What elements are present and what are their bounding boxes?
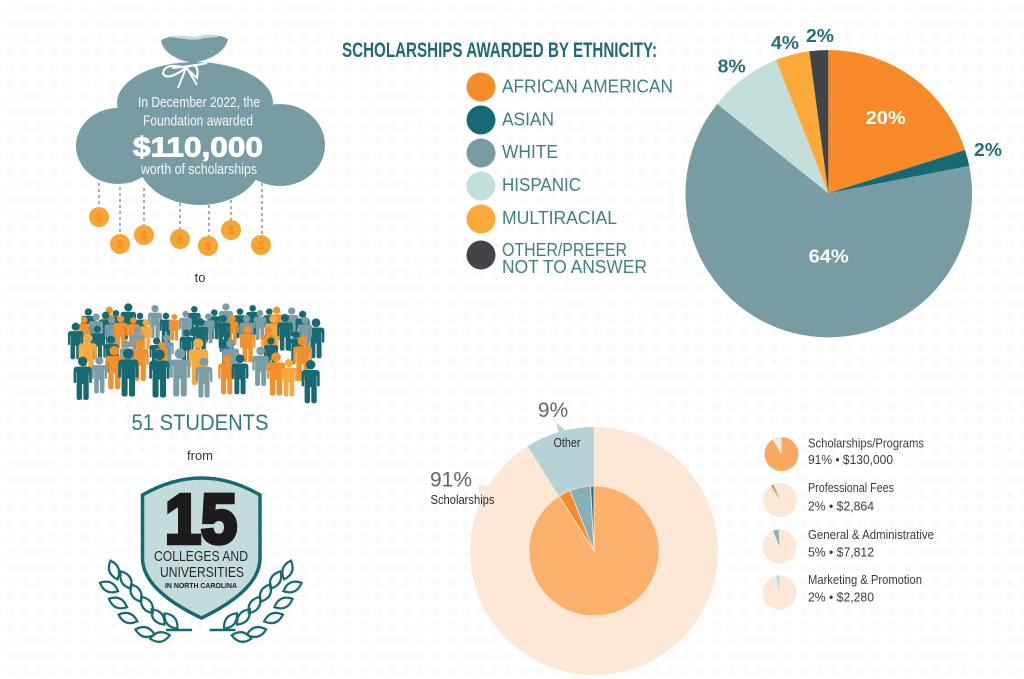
text: colleges and universities: IN NORTH CAROLINA <box>165 581 238 590</box>
donut labels: 91% <box>430 468 472 492</box>
legend item: Other: NOT TO ANSWER <box>502 257 647 277</box>
panel: ethnicity legend <box>466 72 673 277</box>
pie labels: 2% <box>974 140 1002 160</box>
legend item: marketing and promotion: 2% • $2,280 <box>808 590 874 604</box>
icon: dashed coin strings <box>99 183 262 238</box>
text: 51 students: 51 STUDENTS <box>132 410 268 435</box>
legend item: Asian: ASIAN <box>502 110 554 130</box>
panel: colleges badge <box>98 478 304 643</box>
donut labels: Other <box>554 435 581 450</box>
text: award statement: Foundation awarded <box>143 112 253 130</box>
legend item: general and administrative: General & Administrative <box>808 527 934 542</box>
text: from: from <box>187 448 213 463</box>
pie labels: 2% <box>806 26 834 46</box>
text: award statement: $110,000 <box>133 132 263 162</box>
legend item: professional fees: 2% • $2,864 <box>808 498 874 514</box>
legend item: Hispanic: HISPANIC <box>502 175 581 195</box>
donut labels: 9% <box>538 399 568 422</box>
text: colleges and universities <box>154 549 248 590</box>
icon: left laurel <box>98 559 192 643</box>
legend item: Hispanic <box>466 172 581 200</box>
text: award statement: worth of scholarships <box>140 161 257 178</box>
icon: crowd of students <box>68 303 324 403</box>
legend item: African American: AFRICAN AMERICAN <box>502 76 673 96</box>
icon: right laurel <box>210 559 304 643</box>
text: to: to <box>195 270 205 285</box>
legend item: scholarships/programs <box>764 436 924 471</box>
legend item: Multiracial: MULTIRACIAL <box>502 208 617 228</box>
legend item: White: WHITE <box>502 142 558 162</box>
text: award statement: In December 2022, the <box>138 94 260 111</box>
legend item: general and administrative: 5% • $7,812 <box>808 544 874 560</box>
pie labels: 8% <box>718 56 746 76</box>
pie labels <box>718 26 1002 266</box>
pie labels: 64% <box>809 246 849 266</box>
icon: ribbon tie <box>163 63 207 88</box>
text: award statement <box>133 94 263 178</box>
legend item: professional fees: Professional Fees <box>808 480 894 495</box>
legend item: White <box>466 138 558 168</box>
donut labels <box>430 399 581 507</box>
legend item: African American <box>466 72 673 102</box>
legend item: Asian <box>466 106 554 134</box>
legend item: marketing and promotion <box>762 572 922 610</box>
pie labels: 4% <box>771 33 799 53</box>
icon: bag top <box>161 35 228 63</box>
icon: coins <box>89 207 271 256</box>
icon: cloud-shaped bag <box>76 62 325 205</box>
legend item: Multiracial <box>466 204 617 234</box>
panel: money bag cloud <box>76 35 325 256</box>
heading: scholarships by ethnicity: SCHOLARSHIPS AWARDED BY ETHNICITY: <box>342 39 657 62</box>
donut labels: Scholarships <box>430 492 495 507</box>
legend item: general and administrative <box>762 527 934 564</box>
outer ring <box>470 427 718 675</box>
inner pie <box>529 486 659 616</box>
donut chart: budget <box>430 399 718 675</box>
icon: shield <box>142 478 260 618</box>
legend item: marketing and promotion: Marketing & Promotion <box>808 572 922 587</box>
scholarships pointer <box>478 485 489 496</box>
panel: budget legend <box>762 436 934 610</box>
text: colleges and universities: UNIVERSITIES <box>160 565 244 581</box>
legend item: professional fees <box>763 480 894 517</box>
legend item: Other <box>466 240 647 277</box>
pie chart: ethnicity <box>685 26 1002 337</box>
text: colleges and universities: COLLEGES AND <box>154 549 248 565</box>
other wedge <box>528 423 594 551</box>
text: 15: 15 <box>165 480 237 558</box>
legend item: Other: OTHER/PREFER <box>502 240 627 260</box>
pie labels: 20% <box>866 108 906 128</box>
legend item: scholarships/programs: 91% • $130,000 <box>808 452 893 467</box>
legend item: scholarships/programs: Scholarships/Programs <box>808 436 924 450</box>
